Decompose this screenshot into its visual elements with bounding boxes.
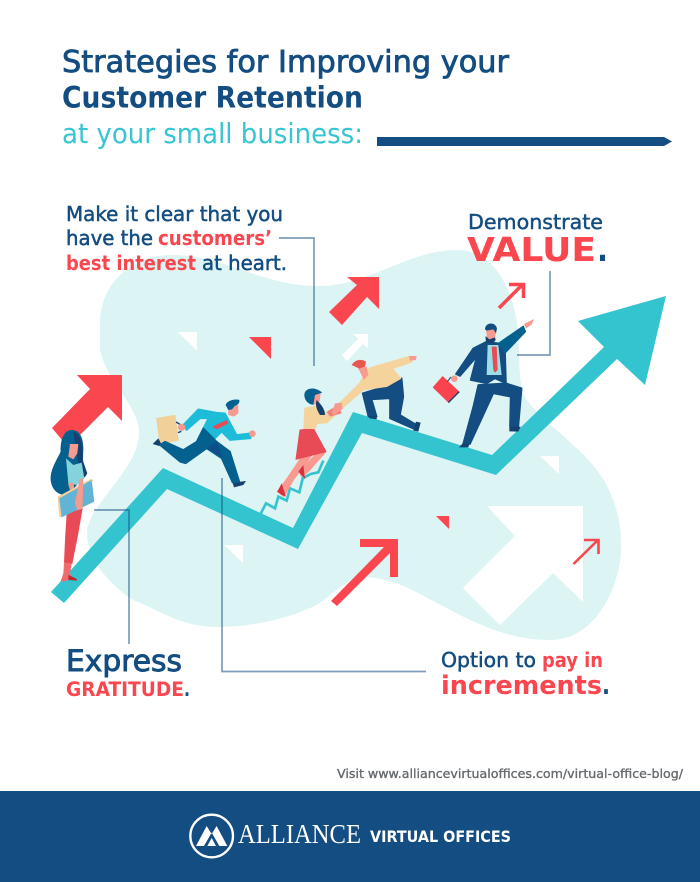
- connector: pay in increments: [222, 478, 426, 672]
- callout: express gratitude: GRATITUDE: [66, 678, 184, 701]
- website link text: Visit www.alliancevirtualoffices.com/virtual-office-blog/: [337, 766, 684, 781]
- callout: demonstrate value: .: [597, 230, 608, 269]
- callout: customers' best interest: Make it clear that you: [66, 202, 283, 226]
- footer band: [0, 791, 700, 882]
- arrow: big red left: [52, 375, 122, 447]
- title rule arrow: [377, 137, 672, 146]
- connector: express gratitude: [94, 510, 129, 644]
- callout: pay in increments: [441, 648, 610, 701]
- callout: customers' best interest: customers’: [158, 226, 272, 250]
- callout: demonstrate value: VALUE: [467, 230, 596, 269]
- background blob: [87, 250, 621, 640]
- figure: running man with briefcase: [153, 399, 256, 487]
- title: [62, 45, 510, 150]
- callout: pay in increments: .: [602, 671, 610, 701]
- arrow: small red outline top: [499, 284, 524, 308]
- title: Strategies for Improving your: [62, 45, 510, 80]
- triangle: white three: [540, 456, 559, 474]
- callout: customers' best interest: at heart.: [202, 251, 287, 275]
- icon: small stairs: [260, 461, 323, 515]
- connector: customers' best interest: [279, 238, 314, 366]
- logo: [190, 815, 511, 857]
- figure: helping man: [332, 356, 421, 432]
- logo wordmark: ALLIANCE: [238, 819, 361, 849]
- callout: pay in increments: pay in: [542, 648, 603, 672]
- decorative arrows and triangles: [52, 277, 598, 625]
- arrow: big red top: [329, 277, 379, 325]
- arrow: white small: [342, 334, 368, 361]
- arrow: small red right: [574, 540, 598, 564]
- callout: customers' best interest: best interest: [66, 251, 196, 275]
- title: at your small business:: [62, 117, 363, 150]
- figure: businessman pointing: [433, 319, 534, 447]
- triangle: red one: [249, 337, 271, 359]
- callout: express gratitude: Express: [66, 644, 182, 678]
- callout: customers' best interest: have the: [66, 226, 153, 250]
- figure: woman with folder: [51, 430, 94, 582]
- figure: climbing woman: [277, 388, 343, 497]
- callout: demonstrate value: [467, 210, 608, 269]
- callout: express gratitude: .: [184, 678, 190, 701]
- title: Customer Retention: [62, 80, 363, 114]
- connector: demonstrate value: [517, 271, 550, 355]
- logo icon: [190, 815, 233, 857]
- triangle: white two: [224, 545, 243, 563]
- arrow: red bottom: [331, 539, 398, 606]
- callout: pay in increments: Option to: [441, 648, 536, 672]
- arrow: big white: [463, 506, 583, 625]
- logo subtitle: VIRTUAL OFFICES: [370, 827, 511, 846]
- callout: demonstrate value: Demonstrate: [468, 210, 603, 234]
- callout: pay in increments: increments: [441, 671, 602, 701]
- growth chart arrow: [51, 296, 666, 603]
- triangle: red two: [436, 516, 449, 529]
- callout: express gratitude: [66, 644, 190, 701]
- triangle: white one: [178, 332, 197, 351]
- callout: customers' best interest: [66, 202, 287, 275]
